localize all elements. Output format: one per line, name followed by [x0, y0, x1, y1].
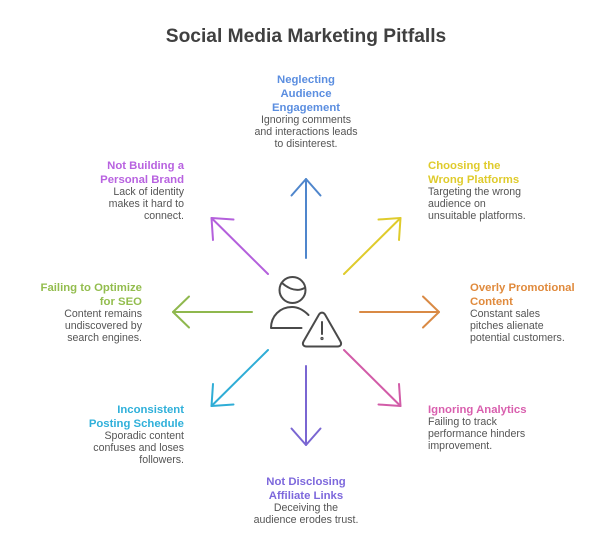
panel: Overly Promotional Content: Overly Promotional — [470, 282, 575, 294]
panel: Not Building a Personal Brand — [100, 160, 185, 222]
panel: Not Disclosing Affiliate Links: Affiliate Links — [269, 490, 343, 502]
panel: Overly Promotional Content — [470, 282, 575, 344]
panel: Neglecting Audience Engagement: Neglecting — [277, 74, 335, 86]
panel: Inconsistent Posting Schedule: followers. — [139, 454, 184, 466]
panel: Neglecting Audience Engagement: Ignoring comments — [261, 114, 351, 126]
panel: Ignoring Analytics: improvement. — [428, 440, 492, 452]
panel: Not Disclosing Affiliate Links: Not Disclosing — [266, 476, 346, 488]
panel: Neglecting Audience Engagement: Engagement — [272, 102, 340, 114]
arrow: down right, pink — [344, 350, 400, 406]
arrow: down left, cyan — [212, 350, 268, 406]
panel: Not Building a Personal Brand: Lack of identity — [113, 186, 185, 198]
panel: Choosing the Wrong Platforms: unsuitable platforms. — [428, 210, 526, 222]
panel: Choosing the Wrong Platforms: Targeting the wrong — [428, 186, 521, 198]
arrow: up left, purple — [212, 218, 268, 274]
panel: Choosing the Wrong Platforms: Wrong Platforms — [428, 174, 519, 186]
panel: Neglecting Audience Engagement: to disinterest. — [274, 138, 338, 150]
panel: Inconsistent Posting Schedule: Inconsistent — [117, 404, 184, 416]
panel: Not Building a Personal Brand: makes it hard to — [109, 198, 184, 210]
panel: Inconsistent Posting Schedule — [89, 404, 184, 466]
panel: Not Building a Personal Brand: connect. — [144, 210, 184, 222]
panel: Neglecting Audience Engagement: Audience — [280, 88, 332, 100]
panel: Not Disclosing Affiliate Links: audience erodes trust. — [254, 514, 358, 526]
panel: Inconsistent Posting Schedule: Posting Schedule — [89, 418, 184, 430]
panel: Not Building a Personal Brand: Personal Brand — [100, 174, 184, 186]
panel: Choosing the Wrong Platforms: audience on — [428, 198, 486, 210]
panel: Choosing the Wrong Platforms — [428, 160, 526, 222]
panel: Failing to Optimize for SEO: undiscovered by — [65, 320, 143, 332]
arrow: down, violet — [292, 366, 320, 445]
panel: Neglecting Audience Engagement: and interactions leads — [254, 126, 358, 138]
icon: person with warning triangle — [271, 277, 341, 346]
panel: Choosing the Wrong Platforms: Choosing the — [428, 160, 500, 172]
panel: Ignoring Analytics: performance hinders — [428, 428, 525, 440]
panel: Overly Promotional Content: Constant sales — [470, 308, 540, 320]
panel: Failing to Optimize for SEO: Content remains — [64, 308, 142, 320]
panel: Not Disclosing Affiliate Links: Deceiving the — [274, 502, 338, 514]
arrow: up, blue — [292, 179, 320, 258]
panel: Inconsistent Posting Schedule: Sporadic content — [104, 430, 184, 442]
panel: Failing to Optimize for SEO: Failing to Optimize — [41, 282, 142, 294]
panel: Ignoring Analytics — [428, 404, 527, 452]
panel: Failing to Optimize for SEO: for SEO — [100, 296, 142, 308]
panel: Inconsistent Posting Schedule: confuses and loses — [93, 442, 184, 454]
arrow: right, orange — [360, 296, 439, 328]
panel: Ignoring Analytics: Ignoring Analytics — [428, 404, 527, 416]
title: Social Media Marketing Pitfalls — [166, 26, 446, 47]
panel: Failing to Optimize for SEO: search engines. — [67, 332, 142, 344]
panel: Not Building a Personal Brand: Not Building a — [107, 160, 185, 172]
panel: Ignoring Analytics: Failing to track — [428, 416, 498, 428]
panel: Overly Promotional Content: potential customers. — [470, 332, 565, 344]
panel: Neglecting Audience Engagement — [254, 74, 358, 150]
panel: Not Disclosing Affiliate Links — [254, 476, 358, 526]
arrow: left, green — [173, 296, 252, 328]
panel: Overly Promotional Content: pitches alienate — [470, 320, 544, 332]
panel: Overly Promotional Content: Content — [470, 296, 513, 308]
arrow: up right, yellow — [344, 218, 400, 274]
panel: Failing to Optimize for SEO — [41, 282, 143, 344]
